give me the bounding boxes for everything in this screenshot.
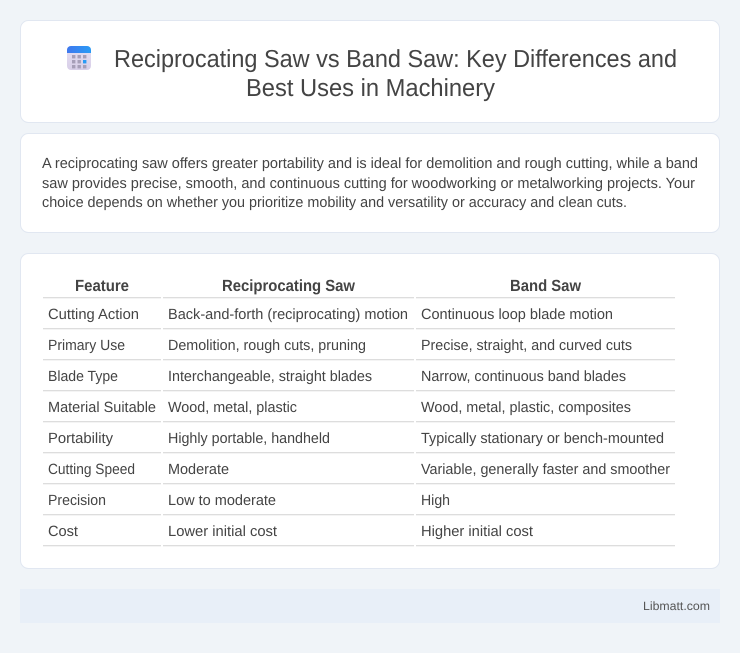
row: material suitable [43,400,675,422]
row: primary use [43,338,675,360]
row: cutting action: Cutting Action [48,307,139,323]
row: primary use: Precise, straight, and curved cuts [421,338,632,354]
row: portability: Highly portable, handheld [168,431,330,447]
row: portability [43,431,675,453]
intro paragraph [42,156,698,211]
intro paragraph: A reciprocating saw offers greater portability and is ideal for demolition and rough cutting, while a band [42,156,698,172]
title: Best Uses in Machinery [246,75,496,102]
title: Reciprocating Saw vs Band Saw: Key Differences and [114,46,677,73]
row: primary use: Demolition, rough cuts, pruning [168,338,366,354]
row: blade type [43,369,675,391]
row: precision: Low to moderate [168,493,276,509]
intro paragraph: choice depends on whether you prioritize mobility and versatility or accuracy and clean cuts. [42,195,627,211]
panel: intro text card [20,134,720,232]
row: cutting speed [43,462,675,484]
row: material suitable: Wood, metal, plastic, composites [421,400,631,416]
row: cutting action [43,307,675,329]
row: cost: Lower initial cost [168,524,277,540]
row: primary use: Primary Use [48,338,125,354]
icon: calendar grid [67,46,91,70]
row: material suitable: Wood, metal, plastic [168,400,298,416]
table header row [43,277,675,298]
table header row: Band Saw [510,277,581,295]
footer bar [20,589,720,623]
row: cutting action: Continuous loop blade motion [421,307,613,323]
row: blade type: Interchangeable, straight blades [168,369,372,385]
title [114,46,677,102]
row: cutting speed: Cutting Speed [48,462,135,478]
table header row: Feature [75,277,129,295]
table header row: Reciprocating Saw [222,277,355,295]
row: precision: Precision [48,493,106,509]
row: cutting speed: Variable, generally faster and smoother [421,462,670,478]
row: material suitable: Material Suitable [48,400,156,416]
row: blade type: Narrow, continuous band blades [421,369,626,385]
row: blade type: Blade Type [48,369,118,385]
row: portability: Typically stationary or bench-mounted [421,431,664,447]
row: cutting speed: Moderate [168,462,229,478]
row: cost [43,524,675,546]
intro paragraph: saw provides precise, smooth, and continuous cutting for woodworking or metalworking projects. Your [42,176,695,192]
footer credit: Libmatt.com [643,599,710,613]
row: precision [43,493,675,515]
panel: comparison table card [20,254,720,568]
panel: title card [20,20,720,122]
row: portability: Portability [48,431,114,447]
row: cost: Cost [48,524,78,540]
row: cost: Higher initial cost [421,524,533,540]
row: precision: High [421,493,450,509]
row: cutting action: Back-and-forth (reciprocating) motion [168,307,408,323]
